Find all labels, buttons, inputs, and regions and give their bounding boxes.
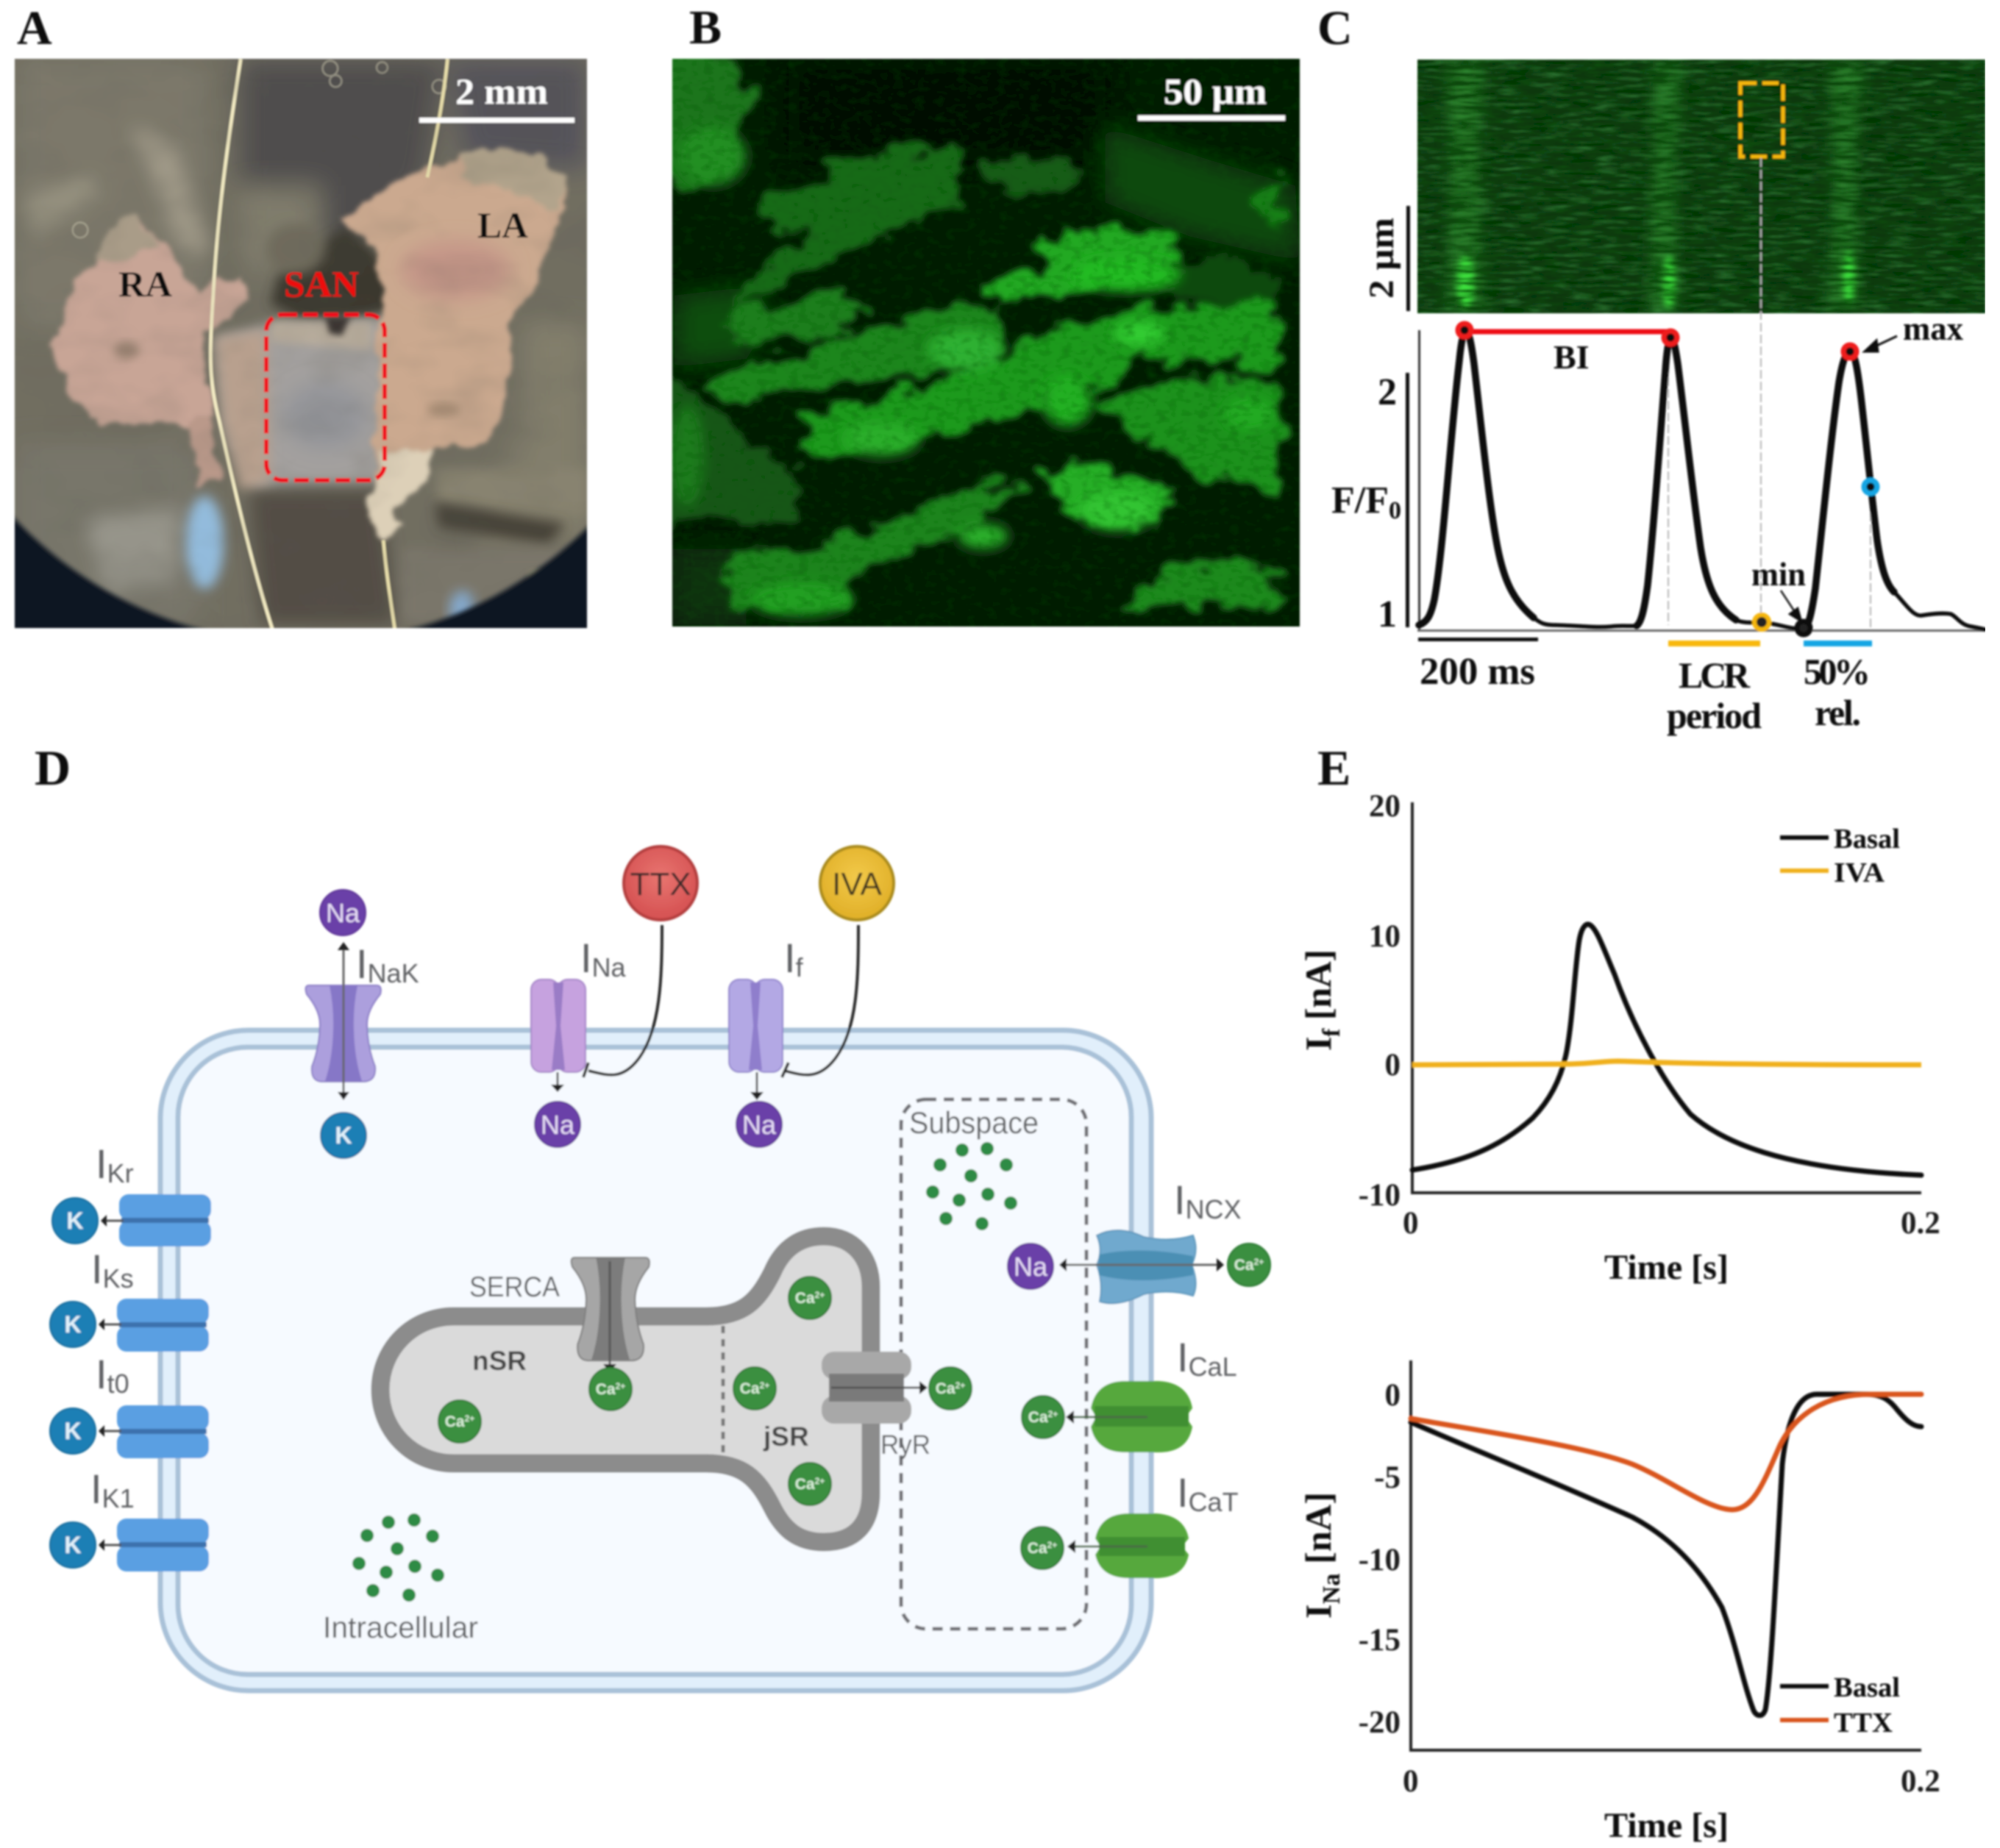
y axis thin [1418, 330, 1420, 630]
axes [1411, 1360, 1921, 1750]
legend: Basal [1834, 824, 1900, 855]
SERCA label: SERCA [469, 1271, 560, 1303]
basal trace [1411, 1394, 1921, 1716]
panel D: cell schematic [50, 846, 1270, 1691]
y ticks [1359, 1378, 1401, 1740]
chart: If current [1298, 789, 1940, 1287]
BI red line [1465, 329, 1670, 334]
vignette [13, 515, 588, 629]
y ticks: 0 [1384, 1378, 1401, 1413]
y ticks [1359, 789, 1401, 1213]
basal trace [1412, 924, 1921, 1175]
blue reflections [186, 496, 224, 589]
legend [1780, 1672, 1900, 1738]
LCR period label: LCR [1679, 654, 1751, 696]
LCR period bar [1668, 641, 1760, 646]
BI label: BI [1554, 338, 1590, 376]
INaK pump [306, 942, 381, 1100]
IVA trace [1412, 1061, 1921, 1065]
Na ions [320, 890, 1053, 1289]
axes [1412, 802, 1921, 1193]
Ca ions in SR and cytosol: 2+ [616, 1381, 625, 1391]
current labels: Ks [103, 1263, 134, 1294]
Ca ions in SR and cytosol: Ca [936, 1380, 955, 1397]
K ions: K [66, 1207, 84, 1234]
y label: Na [1318, 1574, 1345, 1604]
Ca ions in SR and cytosol: 2+ [1048, 1409, 1058, 1419]
subspace label: Subspace [909, 1105, 1039, 1140]
y ticks: 10 [1369, 919, 1401, 954]
wires [210, 59, 272, 629]
K ions: K [64, 1532, 82, 1558]
current labels: CaT [1189, 1487, 1239, 1517]
label RA: RA [118, 263, 172, 304]
If channel [729, 980, 783, 1100]
cell membrane [160, 1030, 1151, 1691]
Na ions: Na [742, 1110, 777, 1140]
current labels: f [796, 952, 804, 982]
x ticks: 0 [1403, 1206, 1418, 1241]
It0 channel [99, 1405, 209, 1458]
INa channel [531, 980, 586, 1092]
K ions: K [64, 1418, 82, 1444]
F/F0 scale bar [1406, 373, 1409, 627]
Ca ions in SR and cytosol: Ca [1028, 1409, 1048, 1426]
SERCA pump [572, 1257, 650, 1372]
Ca ions in SR and cytosol: 2+ [1254, 1257, 1264, 1267]
y ticks: 20 [1369, 789, 1401, 824]
Ca ions in SR and cytosol: Ca [740, 1380, 760, 1397]
50% rel label: rel. [1815, 692, 1861, 733]
TTX inhibition line [583, 925, 662, 1077]
y label: I [1298, 1037, 1339, 1051]
nSR label: nSR [472, 1346, 527, 1376]
x axis [1417, 629, 1985, 632]
2 µm scale bar [1406, 206, 1410, 311]
current labels: Kr [107, 1158, 134, 1188]
Ca ions in SR and cytosol [438, 1244, 1270, 1569]
y ticks: -10 [1359, 1543, 1401, 1577]
intracellular calcium dots [352, 1513, 444, 1602]
current labels [90, 935, 1242, 1517]
legend [1780, 824, 1900, 888]
IVA drug: IVA [832, 866, 882, 902]
x ticks: 0 [1403, 1764, 1418, 1799]
LCR dashed box [1740, 83, 1783, 157]
max label: max [1903, 310, 1963, 347]
x ticks [1403, 1206, 1940, 1241]
current labels: t0 [107, 1369, 129, 1399]
chart: INa current [1298, 1360, 1940, 1845]
current labels: I [356, 941, 368, 987]
Ca ions in SR and cytosol: Ca [596, 1381, 616, 1398]
x ticks: 0.2 [1901, 1206, 1940, 1241]
current labels: I [1174, 1177, 1186, 1223]
calcium transient chart [1331, 310, 1985, 736]
y label: f [1318, 1028, 1345, 1037]
IK1 channel [99, 1519, 209, 1571]
intracellular label: Intracellular [323, 1610, 478, 1644]
Ca ions in SR and cytosol: 2+ [760, 1380, 769, 1391]
IKr channel [101, 1194, 211, 1246]
IKs channel [99, 1299, 209, 1352]
panel label B: B [689, 1, 722, 54]
guide lines [1668, 158, 1871, 629]
200 ms bar [1418, 638, 1538, 641]
current labels: I [91, 1246, 103, 1292]
200 ms label: 200 ms [1420, 651, 1535, 693]
y axis label F/F0: F/F [1331, 479, 1389, 521]
LCR marker [1754, 615, 1769, 629]
Ca ions in SR and cytosol: 2+ [1047, 1540, 1057, 1550]
K ions: K [64, 1311, 82, 1338]
Ca ions in SR and cytosol: 2+ [815, 1476, 825, 1486]
SAN tissue [216, 316, 388, 485]
TTX drug: TTX [630, 866, 691, 902]
y ticks: 0 [1384, 1048, 1401, 1082]
Ca ions in SR and cytosol: Ca [1028, 1540, 1047, 1557]
peak marker 3 [1843, 345, 1857, 358]
TTX drug [624, 846, 697, 920]
RyR label: RyR [880, 1430, 930, 1460]
panel label C: C [1317, 1, 1353, 55]
legend: Basal [1834, 1672, 1900, 1703]
y ticks: -5 [1374, 1460, 1401, 1495]
Ca ions in SR and cytosol: Ca [795, 1476, 815, 1493]
y ticks: -20 [1359, 1705, 1401, 1740]
Ca ions in SR and cytosol: 2+ [465, 1413, 474, 1424]
IVA drug [820, 846, 894, 920]
legend: IVA [1834, 857, 1885, 888]
current labels: I [1177, 1469, 1189, 1516]
Na ions: Na [326, 898, 360, 928]
IVA inhibition line [782, 925, 858, 1077]
current labels: I [1177, 1334, 1189, 1380]
tick 1: 1 [1378, 593, 1397, 635]
Na ions: Na [541, 1110, 575, 1140]
trace: baseline segments [1534, 592, 1985, 629]
tick 2: 2 [1378, 371, 1397, 413]
minimum marker [1797, 621, 1810, 635]
current labels: I [90, 1466, 102, 1512]
Ca ions in SR and cytosol: 2+ [815, 1290, 825, 1300]
arrow to min [1781, 591, 1801, 621]
Na ions: Na [1014, 1252, 1048, 1282]
current labels: K1 [102, 1483, 135, 1513]
current labels: I [96, 1351, 107, 1397]
50% relaxation marker [1864, 480, 1877, 493]
peak marker 2 [1664, 331, 1677, 344]
panel A: photograph of atrial tissue [13, 57, 588, 629]
left atrium tissue [338, 146, 563, 536]
right atrium tissue [46, 213, 249, 485]
panel label E: E [1317, 740, 1350, 796]
subspace calcium dots [926, 1142, 1017, 1230]
current labels: NCX [1186, 1194, 1242, 1224]
y ticks: -15 [1359, 1623, 1401, 1658]
ICaT channel [1067, 1513, 1189, 1578]
y label: [nA] [1298, 949, 1339, 1029]
y label: I [1298, 1605, 1339, 1619]
x ticks [1403, 1764, 1940, 1799]
ICaL channel [1066, 1381, 1192, 1452]
K ions [50, 1113, 366, 1568]
scale bar A [419, 118, 574, 123]
y axis label F/F0: 0 [1389, 497, 1401, 524]
jSR label: jSR [763, 1421, 809, 1452]
sarcoplasmic reticulum [380, 1236, 871, 1542]
min label: min [1751, 555, 1806, 593]
Ca ions in SR and cytosol: Ca [445, 1413, 465, 1430]
LCR period label: period [1667, 695, 1762, 736]
scale label 2 mm: 2 mm [455, 71, 548, 112]
current labels: CaL [1189, 1352, 1237, 1382]
trace: peaks [1419, 332, 1894, 629]
current labels: NaK [368, 958, 419, 988]
y ticks: -10 [1359, 1178, 1401, 1213]
current labels: I [96, 1141, 107, 1187]
y label: [nA] [1298, 1492, 1339, 1573]
panel B: confocal fluorescence image [655, 44, 1300, 627]
nSR/jSR divider [721, 1326, 725, 1452]
x label: Time [s] [1604, 1248, 1729, 1287]
x label: Time [s] [1604, 1806, 1729, 1845]
x ticks: 0.2 [1901, 1764, 1940, 1799]
50% rel label: 50% [1804, 651, 1871, 692]
K ions: K [335, 1122, 352, 1149]
current labels: I [784, 935, 796, 981]
label LA: LA [477, 204, 528, 246]
50% rel bar [1804, 641, 1872, 646]
TTX trace [1411, 1394, 1921, 1510]
Ca ions in SR and cytosol: Ca [1234, 1257, 1254, 1274]
legend: TTX [1834, 1708, 1893, 1738]
current labels: I [580, 935, 592, 981]
scale bar B [1138, 115, 1285, 121]
air bubbles [73, 61, 446, 238]
RyR channel [822, 1352, 928, 1424]
panel label D: D [35, 740, 71, 796]
Ca ions in SR and cytosol: 2+ [955, 1380, 965, 1391]
label SAN: SAN [284, 263, 359, 304]
subspace box [901, 1099, 1086, 1629]
scale label 50 µm: 50 µm [1164, 71, 1267, 112]
current labels: Na [592, 952, 627, 982]
Ca ions in SR and cytosol: Ca [795, 1290, 815, 1307]
panel C: line-scan kymograph [1417, 60, 1985, 313]
2 µm label: 2 µm [1362, 218, 1401, 299]
peak marker 1 [1458, 324, 1471, 337]
ROI: SAN dashed box [266, 315, 385, 480]
panel label A: A [17, 1, 52, 55]
NCX exchanger [1059, 1230, 1224, 1303]
arrow to max [1865, 336, 1897, 352]
